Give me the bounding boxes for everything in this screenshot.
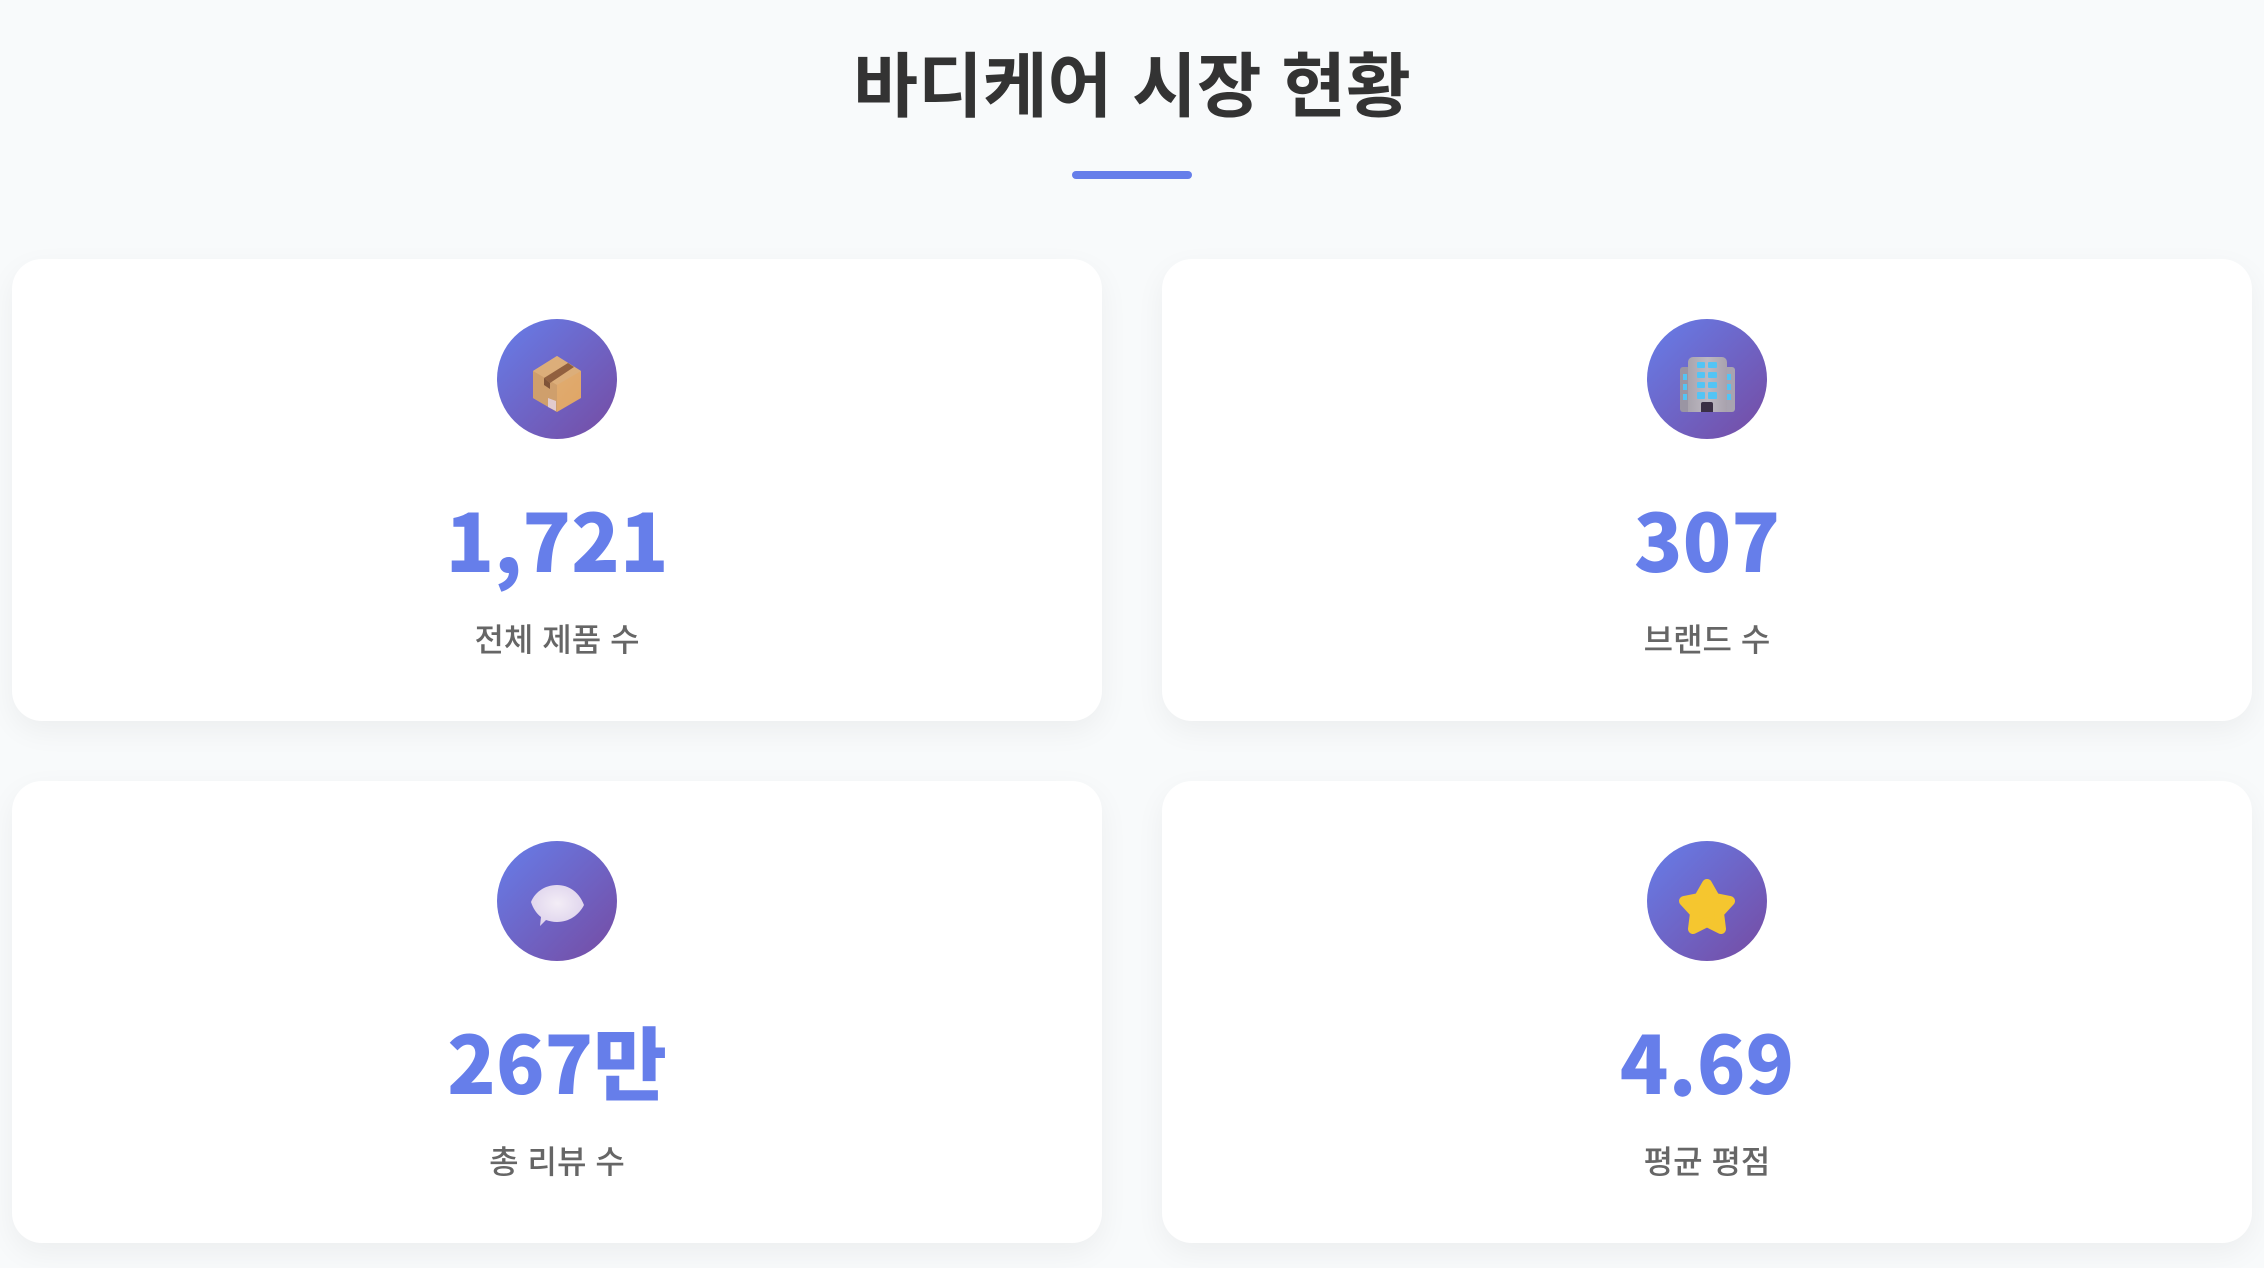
value: 4.69 bbox=[1620, 1002, 1794, 1118]
icon: star bbox=[1647, 841, 1767, 961]
value: 1,721 bbox=[445, 480, 669, 596]
icon: speech balloon bbox=[497, 841, 617, 961]
title: 바디케어 시장 현황 bbox=[853, 30, 1411, 132]
panel: brands bbox=[1162, 259, 2252, 721]
panel: total products bbox=[12, 259, 1102, 721]
panel: total reviews bbox=[12, 781, 1102, 1243]
label: 총 리뷰 수 bbox=[489, 1137, 625, 1183]
icon: package bbox=[497, 319, 617, 439]
label: 평균 평점 bbox=[1644, 1137, 1770, 1183]
label: 전체 제품 수 bbox=[474, 615, 640, 661]
icon: office building bbox=[1647, 319, 1767, 439]
value: 307 bbox=[1634, 480, 1780, 596]
title underline bbox=[1072, 171, 1192, 179]
value: 267만 bbox=[447, 1002, 667, 1118]
panel: average rating bbox=[1162, 781, 2252, 1243]
label: 브랜드 수 bbox=[1644, 615, 1770, 661]
